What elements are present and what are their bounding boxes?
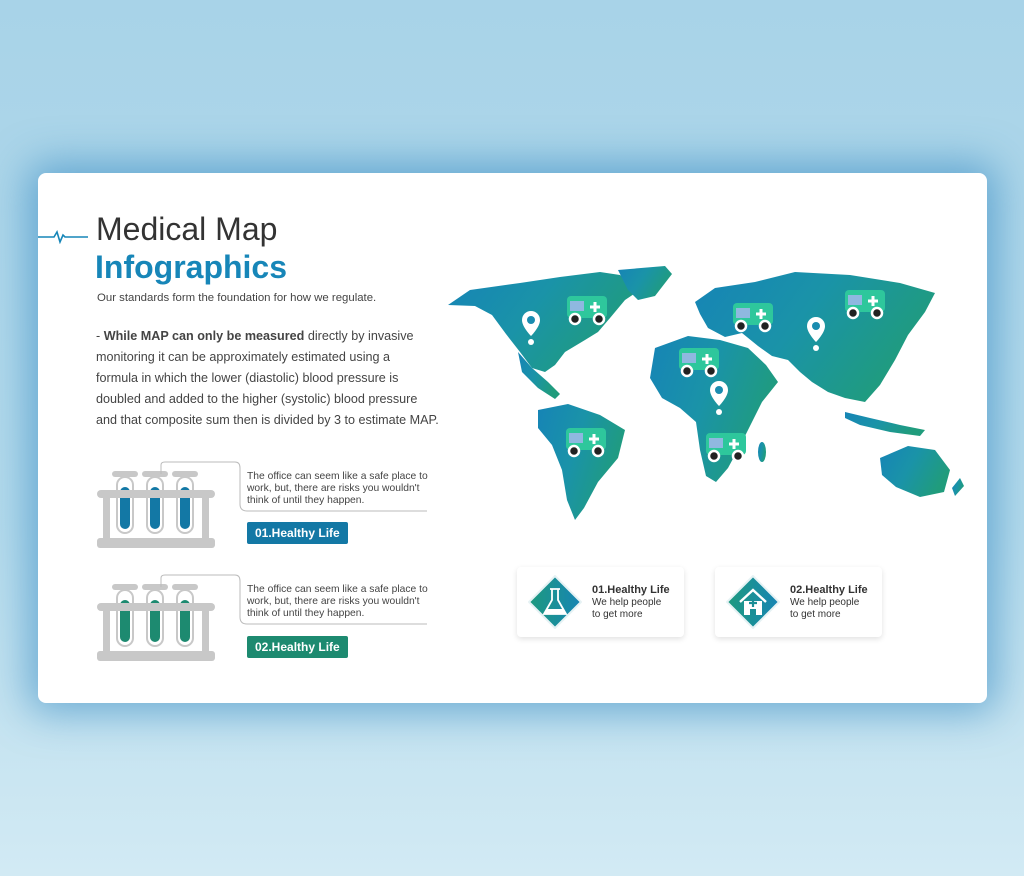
Greenland [618,266,672,300]
description paragraph: and that composite sum then is divided by 3 to estimate MAP. [96,413,439,427]
description paragraph: - While MAP can only be measured directly by invasive [96,329,414,343]
panel: test tubes 1 [97,462,428,548]
info card 1: to get more [592,609,643,620]
badge: 01.Healthy Life [255,526,340,540]
tagline: Our standards form the foundation for how we regulate. [97,292,376,304]
Indonesia [845,412,925,436]
callout text: The office can seem like a safe place to work, but, there are risks you wouldn't think of until they happen. [247,584,428,619]
world map [448,266,964,520]
info card 2 [715,567,882,637]
icon: test tube rack green [97,584,215,661]
callout text: The office can seem like a safe place to work, but, there are risks you wouldn't think of until they happen. [247,471,428,506]
info card 2: We help people [790,597,859,608]
Eurasia [695,272,935,402]
badge [247,636,348,658]
icon: heartbeat line [38,230,88,244]
title: Medical Map [96,211,277,247]
badge: 02.Healthy Life [255,640,340,654]
badge [247,522,348,544]
callout line [160,574,427,624]
North America [448,272,640,372]
Central America [518,352,560,399]
info card 1: 01.Healthy Life [592,584,670,596]
description paragraph: formula in which the lower (diastolic) blood pressure is [96,371,398,385]
description paragraph [96,329,439,427]
icon: house diamond [726,575,780,629]
icon: test tube rack blue [97,471,215,548]
icon: flask diamond [528,575,582,629]
info card 2: to get more [790,609,841,620]
info card 1: We help people [592,597,661,608]
icon: ambulances [567,296,607,324]
Madagascar [758,442,766,462]
main card [38,173,987,703]
South America [538,404,625,520]
callout line [160,462,427,512]
info card 2: 02.Healthy Life [790,584,868,596]
description paragraph: monitoring it can be approximately estimated using a [96,350,390,364]
panel: test tubes 2 [97,574,428,661]
info card 1 [517,567,684,637]
description paragraph: doubled and added to the higher (systolic) blood pressure [96,392,417,406]
subtitle heading: Infographics [95,249,287,285]
Africa [650,336,778,482]
icon: map pins [522,311,540,345]
Australia [880,446,950,497]
